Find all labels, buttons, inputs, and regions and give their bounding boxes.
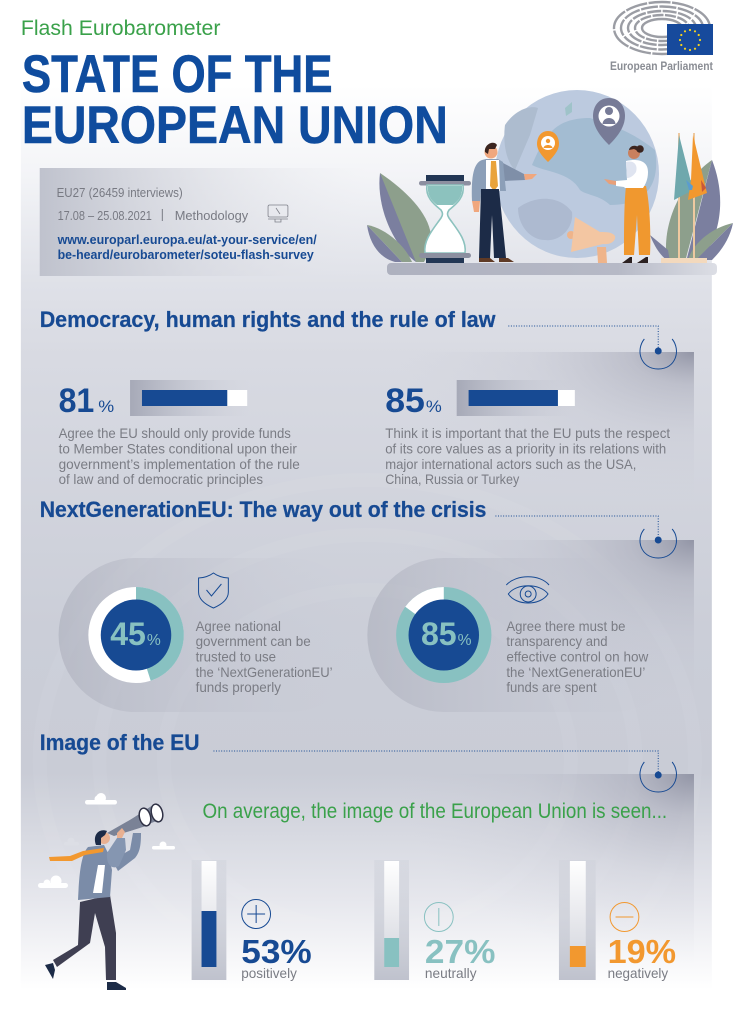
gauge tube	[384, 861, 399, 967]
description: the ‘NextGenerationEU’	[506, 665, 645, 680]
panel background	[397, 352, 694, 502]
stat: 85% transparency	[367, 558, 690, 712]
description: the ‘NextGenerationEU’	[196, 665, 333, 680]
section: NextGenerationEU	[40, 497, 694, 720]
stat: 81%: %	[98, 397, 114, 416]
label: negatively	[608, 966, 668, 981]
logo: European Parliament	[610, 2, 713, 73]
description: of law and of democratic principles	[59, 472, 263, 487]
value: 85	[421, 616, 457, 652]
icon: target marker	[640, 339, 676, 369]
stat: 45% trust: %	[147, 632, 161, 649]
dates and methodology	[58, 209, 249, 223]
dotted connector	[508, 326, 658, 349]
description	[196, 619, 333, 695]
description: transparency and	[506, 634, 608, 649]
value: 19%	[608, 933, 676, 970]
pill backing	[59, 558, 366, 712]
icon: computer	[268, 205, 288, 222]
label: positively	[241, 966, 297, 981]
value: 85	[385, 382, 425, 420]
plants left	[367, 173, 431, 262]
globe	[495, 90, 659, 258]
gauge backing	[192, 860, 226, 980]
bar backing	[130, 380, 249, 416]
pill backing	[367, 558, 690, 712]
gauge: negatively 19%	[559, 860, 676, 981]
icon: plus	[242, 900, 271, 928]
value: 53%	[241, 933, 312, 970]
heading: Democracy, human rights and the rule of law	[40, 307, 496, 332]
dates and methodology: Methodology	[175, 209, 249, 223]
description: effective control on how	[506, 649, 649, 665]
bar	[469, 390, 558, 406]
donut chart	[396, 587, 491, 683]
value: 27%	[425, 933, 495, 970]
value: 81	[59, 382, 94, 420]
gauge fill	[384, 938, 399, 967]
near arm	[107, 838, 126, 867]
gauge backing	[374, 860, 409, 980]
icon: hourglass	[419, 175, 471, 263]
description: major international actors such as the USA,	[385, 457, 636, 472]
dates and methodology: 17.08 – 25.08.2021	[58, 209, 152, 223]
far arm	[112, 833, 141, 871]
description	[59, 426, 300, 487]
bar backing	[457, 380, 576, 416]
survey url: be-heard/eurobarometer/soteu-flash-survey	[58, 248, 314, 262]
gauge fill	[570, 946, 586, 967]
gauge: neutrally 27%	[374, 860, 495, 981]
description	[385, 426, 670, 487]
label: neutrally	[425, 966, 477, 981]
dotted connector	[213, 751, 658, 772]
head	[98, 832, 110, 844]
description: to Member States conditional upon their	[59, 441, 297, 457]
stat: 85%: %	[426, 397, 442, 416]
subheading: On average, the image of the European Union is seen...	[203, 800, 667, 823]
icon: eye	[506, 577, 549, 603]
panel background	[397, 774, 694, 964]
description: government can be	[196, 634, 311, 649]
gauge backing	[559, 860, 596, 980]
icon: neutral	[424, 902, 453, 932]
illustration: globe scene	[367, 90, 733, 275]
value: 45	[110, 616, 146, 652]
kicker: Flash Eurobarometer: Flash Eurobarometer	[21, 17, 220, 40]
stat: 81%	[59, 380, 300, 487]
jacket	[78, 845, 112, 900]
heading: NextGenerationEU: The way out of the crisis	[40, 497, 486, 522]
icon: target marker	[640, 762, 676, 792]
shirt	[93, 865, 105, 893]
description: China, Russia or Turkey	[385, 472, 519, 487]
logo wordmark: European Parliament	[610, 59, 713, 73]
survey url: www.europarl.europa.eu/at-your-service/en/	[57, 233, 317, 247]
stat: 85%	[385, 380, 670, 487]
stat: 45% trust	[59, 558, 366, 712]
figure: woman	[604, 145, 650, 263]
gauge fill	[202, 911, 216, 967]
hand	[117, 828, 125, 838]
description: funds are spent	[506, 680, 597, 695]
survey url	[57, 233, 317, 262]
section: image of the EU	[40, 730, 694, 981]
shoes	[45, 963, 126, 990]
heading: Image of the EU	[40, 730, 200, 755]
section: democracy, human rights and the rule of law	[40, 307, 694, 502]
icon: grey location pin	[593, 98, 625, 145]
plants right	[650, 160, 733, 262]
donut chart	[88, 587, 184, 683]
title: EUROPEAN UNION	[22, 96, 448, 155]
bar	[142, 390, 227, 406]
title: STATE OF THE	[22, 45, 333, 104]
icon: orange location pin	[537, 131, 559, 162]
trousers	[53, 895, 116, 980]
flags	[661, 133, 707, 263]
icon: EU flag	[667, 24, 713, 55]
background hemicycle arcs	[40, 480, 695, 1024]
title	[22, 45, 448, 155]
icon: minus	[610, 902, 639, 932]
description: Think it is important that the EU puts the respect	[385, 426, 670, 441]
binoculars	[107, 803, 165, 836]
description: of its core values as a priority in its relations with	[385, 441, 666, 457]
description: government’s implementation of the rule	[59, 457, 300, 472]
description: trusted to use	[196, 649, 276, 665]
description	[506, 619, 649, 695]
gauge: positively 53%	[192, 860, 312, 981]
tie	[49, 848, 104, 861]
gauge tube	[570, 861, 586, 967]
platform	[387, 263, 717, 275]
illustration: man with binoculars	[38, 793, 175, 990]
clouds	[38, 793, 175, 888]
interviews text: EU27 (26459 interviews)	[57, 186, 183, 200]
icon: hemicycle	[614, 2, 710, 54]
description: Agree the EU should only provide funds	[59, 426, 291, 441]
figure: man	[472, 143, 537, 262]
description: Agree national	[196, 619, 281, 634]
panel: survey information	[40, 168, 367, 276]
panel background	[397, 540, 694, 720]
stat: 85% transparency: %	[458, 632, 472, 649]
icon: shield	[199, 573, 228, 608]
description: Agree there must be	[506, 619, 625, 634]
dotted connector	[495, 516, 658, 538]
icon: target marker	[640, 529, 676, 558]
description: funds properly	[196, 680, 281, 695]
gauge tube	[202, 861, 216, 967]
icon: megaphone	[567, 217, 615, 263]
